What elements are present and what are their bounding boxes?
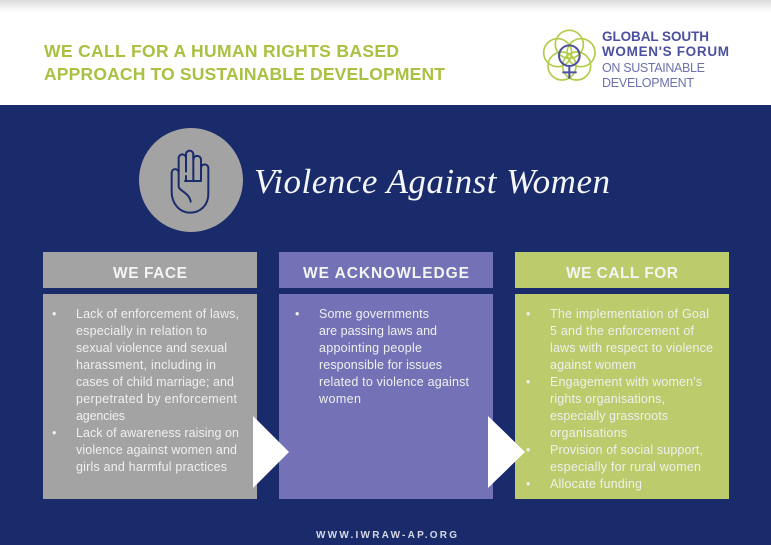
arrow: acknowledge to call for [488, 416, 525, 488]
footer url: WWW.IWRAW-AP.ORG [316, 530, 457, 541]
panel header: we acknowledge: WE ACKNOWLEDGE [303, 265, 469, 282]
panel body: we face list: perpetrated by enforcement [76, 392, 238, 406]
panel body: we acknowledge list: are passing laws and [319, 324, 437, 338]
panel body: we face list: especially in relation to [76, 324, 207, 338]
panel body: we face list: girls and harmful practices [76, 460, 227, 474]
panel body: we call for list: The implementation of Goal [550, 307, 709, 321]
logo text: ON SUSTAINABLE [602, 61, 705, 75]
title: Violence Against Women [254, 162, 610, 201]
panel body: we acknowledge list: • [295, 307, 299, 321]
panel body: we face list: Lack of enforcement of laws, [76, 307, 239, 321]
panel body: we face list: sexual violence and sexual [76, 341, 227, 355]
panel header: we face [43, 252, 257, 288]
panel body: we call for list: laws with respect to violence [550, 341, 713, 355]
arrow: face to acknowledge [253, 416, 289, 488]
panel header: we face: WE FACE [113, 265, 187, 282]
panel body: we call for list: • [526, 443, 530, 457]
heading: human rights call: WE CALL FOR A HUMAN RIGHTS BASED [44, 41, 399, 61]
panel body: we call for list [515, 294, 729, 499]
panel body: we call for list: • [526, 307, 530, 321]
logo text: DEVELOPMENT [602, 76, 694, 90]
icon: logo circles and female symbol [544, 30, 595, 80]
panel header: we acknowledge [279, 252, 493, 288]
logo text: GLOBAL SOUTH [602, 29, 709, 44]
header band [0, 0, 771, 105]
panel body: we call for list: Provision of social support, [550, 443, 703, 457]
panel body: we call for list: • [526, 477, 530, 491]
panel body: we face list: • [52, 426, 56, 440]
logo: Global South Women's Forum [544, 29, 729, 90]
panel body: we acknowledge list: appointing people [319, 341, 422, 355]
panel body: we call for list: Allocate funding [550, 477, 642, 491]
panel body: we acknowledge list: Some governments [319, 307, 429, 321]
heading: human rights call [44, 41, 445, 84]
panel body: we face list: cases of child marriage; and [76, 375, 234, 389]
panel body: we acknowledge list: women [318, 392, 361, 406]
panel body: we call for list: organisations [550, 426, 627, 440]
panel body: we face list: violence against women and [76, 443, 237, 457]
panel: we face [43, 252, 257, 499]
panel body: we face list: harassment, including in [76, 358, 216, 372]
panel body: we call for list: rights organisations, [550, 392, 665, 406]
panel body: we call for list: Engagement with women's [550, 375, 702, 389]
panel body: we face list [43, 294, 257, 499]
panel: we acknowledge [279, 252, 493, 499]
panel header: we call for [515, 252, 729, 288]
panel body: we acknowledge list: responsible for issues [319, 358, 442, 372]
panel: we call for [515, 252, 729, 499]
panel body: we call for list: • [526, 375, 530, 389]
panel body: we call for list: 5 and the enforcement of [550, 324, 695, 338]
panel body: we call for list: especially grassroots [550, 409, 668, 423]
panel header: we call for: WE CALL FOR [566, 265, 678, 282]
panel body: we acknowledge list: related to violence against [319, 375, 470, 389]
panel body: we call for list: especially for rural women [550, 460, 701, 474]
logo text [602, 29, 729, 90]
logo text: WOMEN'S FORUM [602, 44, 729, 59]
panel body: we call for list: against women [550, 358, 636, 372]
icon: raised hand in grey circle [139, 128, 243, 232]
panel body: we face list: Lack of awareness raising on [76, 426, 239, 440]
panel body: we acknowledge list [279, 294, 493, 499]
panel body: we face list: agencies [76, 409, 125, 423]
panel body: we face list: • [52, 307, 56, 321]
heading: human rights call: APPROACH TO SUSTAINABLE DEVELOPMENT [44, 64, 445, 84]
